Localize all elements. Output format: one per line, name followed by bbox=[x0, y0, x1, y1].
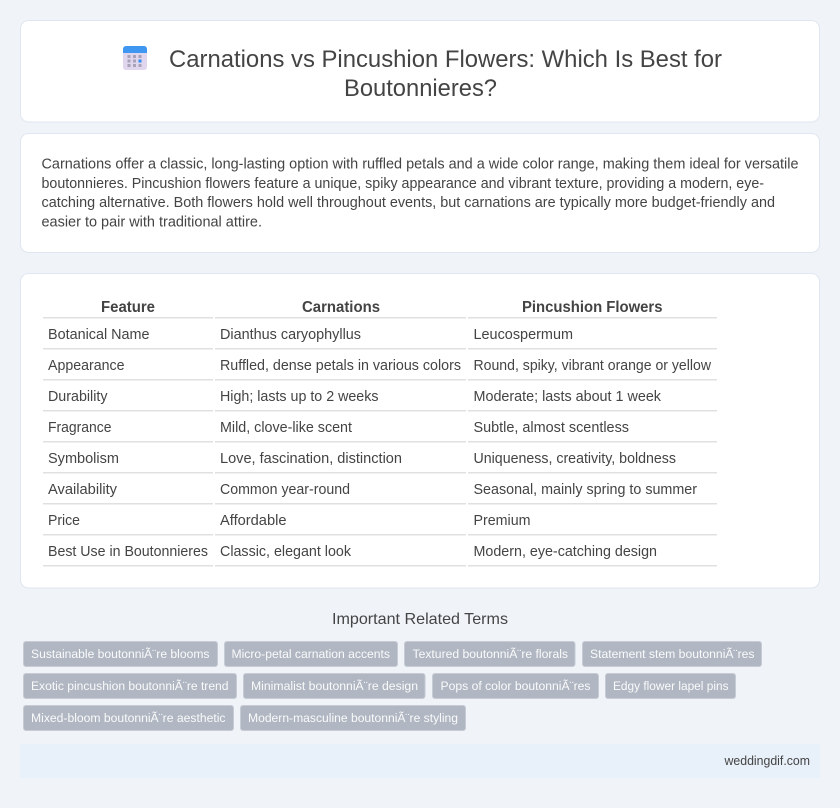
row: symbolism bbox=[48, 451, 676, 467]
row: botanical name bbox=[48, 327, 573, 343]
panel: summary text: catching alternative. Both flowers hold well throughout events, but carnations are typically more budget-friendly and bbox=[42, 195, 775, 211]
row: durability: Moderate; lasts about 1 week bbox=[474, 389, 662, 405]
tag bbox=[24, 642, 218, 666]
row: durability: High; lasts up to 2 weeks bbox=[220, 389, 378, 405]
row: best use: Modern, eye-catching design bbox=[474, 544, 657, 560]
tag: Minimalist boutonniÃ¨re design bbox=[251, 679, 418, 693]
tag: Edgy flower lapel pins bbox=[613, 679, 728, 693]
tag: Pops of color boutonniÃ¨res bbox=[440, 679, 590, 693]
tag: Sustainable boutonniÃ¨re blooms bbox=[31, 647, 210, 661]
panel: summary text: Carnations offer a classic, long-lasting option with ruffled petals and a wide color range, making them ideal for versatile bbox=[42, 156, 799, 172]
tag bbox=[24, 674, 236, 698]
tag bbox=[404, 642, 575, 666]
panel: comparison table bbox=[20, 274, 820, 588]
row: availability: Common year-round bbox=[220, 482, 350, 498]
row: durability: Durability bbox=[48, 389, 108, 405]
panel: header bbox=[20, 20, 820, 122]
tag bbox=[582, 642, 762, 666]
row: fragrance: Mild, clove-like scent bbox=[220, 420, 352, 436]
row: botanical name: Leucospermum bbox=[474, 327, 573, 343]
row: appearance: Appearance bbox=[48, 358, 124, 374]
row: price: Affordable bbox=[220, 513, 286, 529]
row: availability: Seasonal, mainly spring to summer bbox=[474, 482, 697, 498]
row: price bbox=[48, 513, 531, 529]
heading: related terms: Important Related Terms bbox=[332, 611, 508, 628]
row: best use: Best Use in Boutonnieres bbox=[48, 544, 208, 560]
row: availability: Availability bbox=[48, 482, 118, 498]
tag: Modern-masculine boutonniÃ¨re styling bbox=[248, 711, 458, 725]
tag bbox=[24, 706, 234, 730]
tag bbox=[432, 674, 598, 698]
tag: Exotic pincushion boutonniÃ¨re trend bbox=[31, 679, 229, 693]
row: fragrance: Subtle, almost scentless bbox=[474, 420, 629, 436]
row: fragrance bbox=[48, 420, 629, 436]
row: botanical name: Dianthus caryophyllus bbox=[220, 327, 361, 343]
title: Carnations vs Pincushion Flowers: Which Is Best for bbox=[169, 46, 722, 73]
tag: Statement stem boutonniÃ¨res bbox=[590, 647, 754, 661]
row: fragrance: Fragrance bbox=[48, 420, 112, 436]
table header row: Feature bbox=[101, 299, 155, 316]
panel: summary text: boutonnieres. Pincushion flowers feature a unique, spiky appearance and vibrant texture, providing a modern, eye- bbox=[42, 176, 764, 192]
row: symbolism: Uniqueness, creativity, boldness bbox=[474, 451, 676, 467]
row: symbolism: Love, fascination, distinction bbox=[220, 451, 402, 467]
row: availability bbox=[48, 482, 697, 498]
row: price: Premium bbox=[474, 513, 531, 529]
tag bbox=[240, 706, 466, 730]
footer bar bbox=[20, 744, 820, 778]
row: symbolism: Symbolism bbox=[48, 451, 119, 467]
panel: summary text: easier to pair with traditional attire. bbox=[42, 214, 262, 230]
tag: Textured boutonniÃ¨re florals bbox=[412, 647, 568, 661]
tag bbox=[244, 674, 425, 698]
tag bbox=[606, 674, 736, 698]
icon: calendar bbox=[123, 46, 147, 70]
row: appearance: Ruffled, dense petals in various colors bbox=[220, 358, 461, 374]
table header row bbox=[101, 299, 663, 316]
tag: Mixed-bloom boutonniÃ¨re aesthetic bbox=[31, 711, 226, 725]
tag: Micro-petal carnation accents bbox=[232, 647, 390, 661]
table header row: Carnations bbox=[302, 299, 380, 316]
title bbox=[169, 46, 722, 102]
panel: summary text bbox=[20, 134, 820, 252]
row: best use: Classic, elegant look bbox=[220, 544, 352, 560]
title: Boutonnieres? bbox=[344, 75, 497, 102]
row: durability bbox=[48, 389, 662, 405]
row: best use bbox=[48, 544, 657, 560]
table header row: Pincushion Flowers bbox=[522, 299, 663, 316]
row: botanical name: Botanical Name bbox=[48, 327, 150, 343]
row: price: Price bbox=[48, 513, 80, 529]
row: appearance bbox=[48, 358, 712, 374]
tag bbox=[224, 642, 398, 666]
row: appearance: Round, spiky, vibrant orange or yellow bbox=[474, 358, 712, 374]
related term tags bbox=[24, 642, 762, 730]
footer bar: weddingdif.com bbox=[724, 753, 810, 768]
